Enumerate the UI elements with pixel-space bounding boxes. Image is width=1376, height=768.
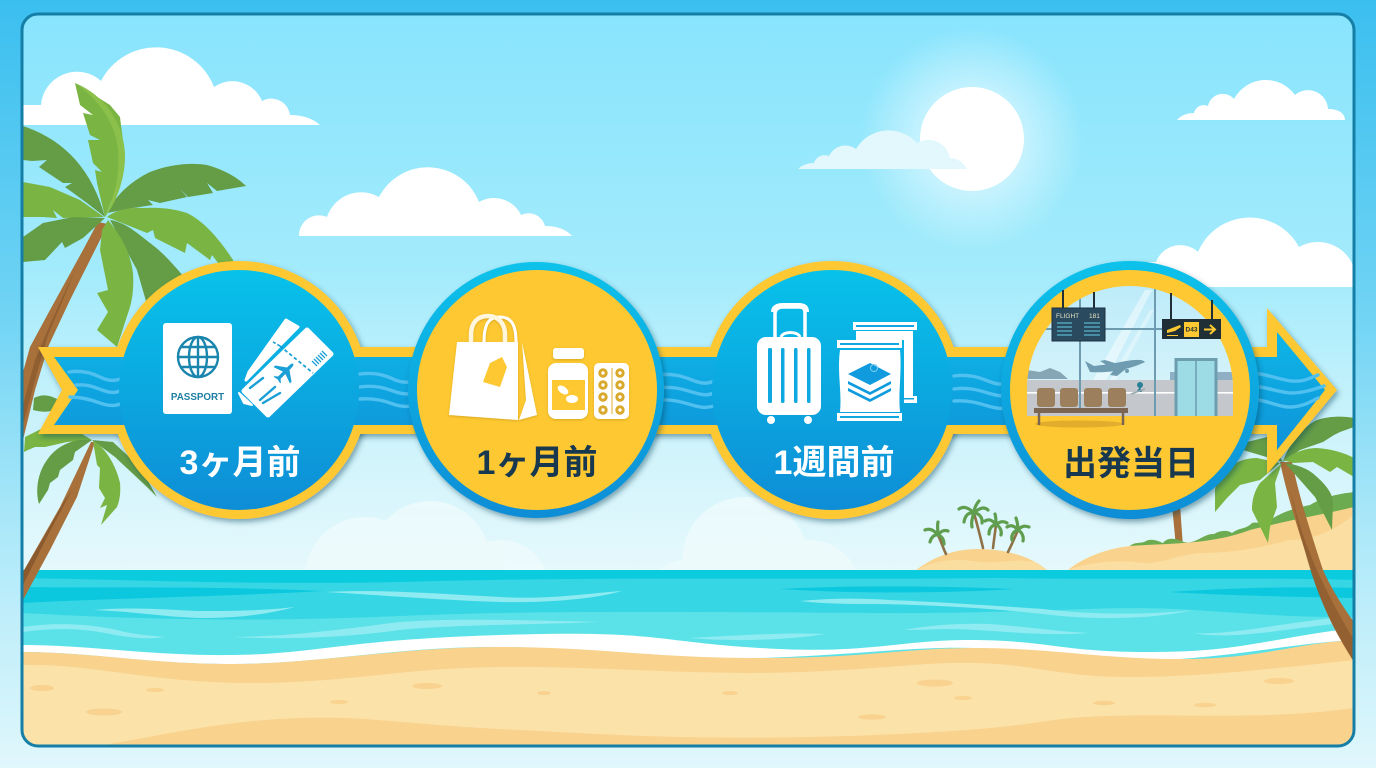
palm tree: right bbox=[1215, 417, 1354, 662]
icon: blister pack bbox=[594, 363, 629, 419]
label: 1 week before: 1週間前 bbox=[774, 444, 894, 482]
wave streaks bbox=[23, 591, 1333, 640]
cloud: beside sun bbox=[798, 130, 967, 169]
cloud: top left bbox=[20, 47, 320, 125]
icon: passport: PASSPORT bbox=[171, 392, 224, 403]
sand bbox=[22, 640, 1354, 750]
sky bbox=[22, 14, 1354, 574]
flight board: 181 bbox=[1089, 313, 1100, 320]
palm tree: top left bbox=[23, 83, 246, 440]
wave lines bbox=[69, 371, 1324, 408]
gate sign: D43 bbox=[1186, 326, 1198, 334]
foam line bbox=[22, 628, 1354, 664]
icon: medicine bottle bbox=[548, 348, 588, 419]
step 4 disc bbox=[1001, 261, 1259, 519]
cloud: centre bbox=[299, 167, 572, 236]
small island with palms bbox=[916, 501, 1047, 570]
label: departure day: 出発当日 bbox=[1063, 445, 1199, 483]
runner bbox=[1131, 382, 1145, 394]
step 2: 1ヶ月前 bbox=[408, 262, 664, 518]
sea bbox=[22, 570, 1354, 670]
step 4: 出発当日 bbox=[1001, 261, 1259, 519]
step 2 disc bbox=[408, 262, 664, 518]
step 1: 3ヶ月前 bbox=[119, 270, 359, 510]
icon: passport bbox=[163, 323, 232, 414]
step 1 blue disc bbox=[119, 270, 359, 510]
ribbon yellow outline with tail and arrowhead bbox=[38, 308, 1337, 474]
plane bbox=[1085, 360, 1145, 376]
flight board: FLIGHT bbox=[1056, 313, 1079, 320]
timeline ribbon arrow bbox=[38, 261, 1337, 519]
right hill with bushes bbox=[1068, 492, 1354, 570]
label: 3 months before: 3ヶ月前 bbox=[180, 444, 300, 482]
soft clouds on horizon bbox=[306, 497, 854, 570]
label: 1 month before: 1ヶ月前 bbox=[477, 444, 597, 482]
background palm trunk bbox=[1172, 508, 1183, 542]
icon: compression bags bbox=[837, 322, 917, 421]
gate sign bbox=[1162, 293, 1221, 339]
icon: airline tickets bbox=[239, 320, 331, 415]
airport window scene bbox=[1025, 284, 1235, 418]
cloud: right large bbox=[1140, 218, 1354, 287]
seats bbox=[1034, 388, 1128, 428]
flight board bbox=[1052, 290, 1105, 341]
sun bbox=[870, 36, 1074, 240]
sand ripples bbox=[30, 678, 1294, 720]
cloud: top right bbox=[1177, 80, 1345, 120]
door bbox=[1176, 360, 1216, 418]
circle outlines for steps 1 and 3 bbox=[110, 261, 961, 519]
icon: shopping bag bbox=[449, 316, 537, 420]
step 3: 1週間前 bbox=[712, 270, 952, 510]
step 3 blue disc bbox=[712, 270, 952, 510]
ribbon blue fill bbox=[54, 332, 1325, 450]
palm tree: lower left bbox=[23, 395, 157, 600]
icon: suitcase bbox=[757, 305, 821, 424]
